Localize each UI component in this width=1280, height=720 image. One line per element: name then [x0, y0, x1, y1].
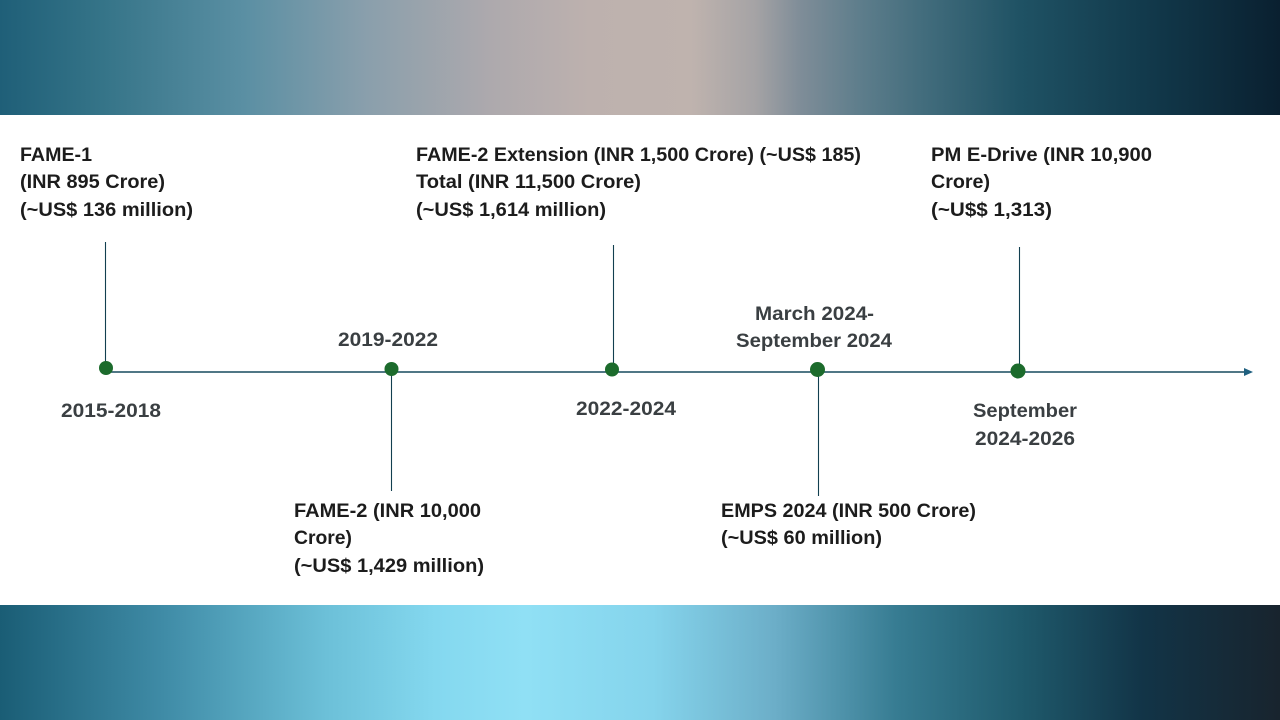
milestone: FAME-2 — [294, 329, 484, 577]
top background band — [0, 0, 1280, 115]
milestone: PM E-Drive: 2024-2026 — [975, 428, 1075, 450]
milestone: FAME-2: Crore) — [294, 527, 352, 549]
milestone: FAME-2 Extension: 2022-2024 — [576, 398, 676, 420]
milestone: FAME-2 Extension — [416, 144, 861, 420]
milestone: FAME-1 — [20, 144, 193, 422]
milestone: EMPS 2024 — [721, 303, 976, 549]
bottom background band — [0, 605, 1280, 720]
milestone: FAME-2 Extension: FAME-2 Extension (INR 1,500 Crore) (~US$ 185) — [416, 144, 861, 166]
white content panel — [0, 115, 1280, 605]
milestone: PM E-Drive — [931, 144, 1152, 450]
milestone: PM E-Drive: (~U$$ 1,313) — [931, 199, 1052, 221]
milestone: FAME-2: FAME-2 (INR 10,000 — [294, 500, 481, 522]
milestone: FAME-1: 2015-2018 — [61, 400, 161, 422]
milestone: FAME-1: (INR 895 Crore) — [20, 171, 165, 193]
milestone: FAME-2 Extension: (~US$ 1,614 million) — [416, 199, 606, 221]
milestone: FAME-2: 2019-2022 — [338, 329, 438, 351]
timeline axis arrow — [106, 368, 1253, 376]
milestone: FAME-1: FAME-1 — [20, 144, 92, 166]
milestone: PM E-Drive: Crore) — [931, 171, 990, 193]
milestone: FAME-1: (~US$ 136 million) — [20, 199, 193, 221]
milestone: FAME-2 Extension: Total (INR 11,500 Crore) — [416, 171, 641, 193]
milestone: EMPS 2024: March 2024- — [755, 303, 874, 325]
milestone: PM E-Drive: PM E-Drive (INR 10,900 — [931, 144, 1152, 166]
milestone: EMPS 2024: (~US$ 60 million) — [721, 527, 882, 549]
milestone: EMPS 2024: EMPS 2024 (INR 500 Crore) — [721, 500, 976, 522]
milestone: PM E-Drive: September — [973, 400, 1077, 422]
milestone: FAME-2: (~US$ 1,429 million) — [294, 555, 484, 577]
milestone: EMPS 2024: September 2024 — [736, 330, 892, 352]
